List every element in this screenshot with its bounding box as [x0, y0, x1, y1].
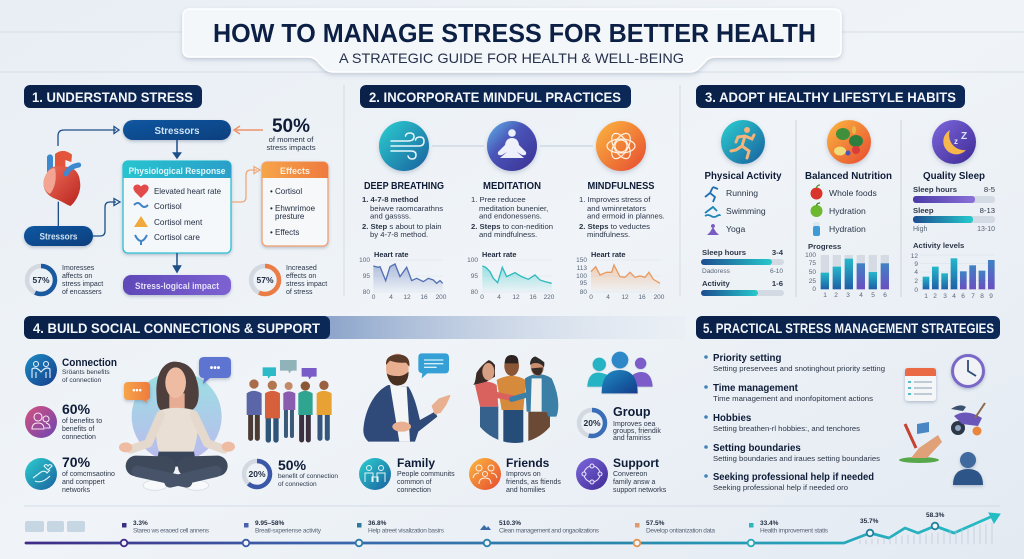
icon: meditation [487, 121, 537, 171]
item: 70 percent: of comcmsaotino [62, 471, 115, 478]
bar chart: progress: 6 [883, 292, 887, 299]
physiological response box: Cortisol ment [154, 218, 203, 227]
line chart: heart rate mindfulness: 12 [621, 294, 629, 301]
icon: heart rate [133, 184, 149, 198]
panel: social connections [24, 316, 685, 494]
timeline stat 4 [480, 520, 600, 534]
line chart: heart rate meditation: 0 [480, 294, 484, 301]
icon: group of users [587, 352, 653, 393]
line chart: heart rate meditation [467, 250, 555, 301]
column: meditation: and endonessens. [479, 212, 542, 220]
timeline stat 4: Clean management and ongaolizations [499, 528, 600, 534]
line chart: heart rate meditation: 12 [512, 294, 520, 301]
bar chart: activity levels [911, 253, 995, 300]
item: support: family answ a [613, 479, 656, 486]
effects box [262, 162, 328, 246]
line chart: heart rate meditation: 95 [471, 273, 478, 280]
item: 60 percent [25, 401, 102, 441]
main title: HOW TO MANAGE STRESS FOR BETTER HEALTH [213, 18, 816, 48]
strategy: seeking professional help: Seeking professional help if needed oro [713, 483, 848, 492]
donut: 57 percent right: of stress [286, 289, 313, 296]
line chart: heart rate mindfulness: 80 [580, 289, 587, 296]
timeline stat 4: 510.3% [499, 520, 521, 527]
icon: sleep [932, 120, 976, 164]
physiological response box: Elevated heart rate [154, 187, 221, 196]
top stressors pill [123, 120, 231, 140]
timeline stat 5 [635, 520, 715, 534]
timeline stat 6: 33.4% [760, 520, 779, 527]
item: 60 percent: connection [62, 434, 96, 441]
physiological response box [123, 161, 231, 253]
column: meditation: meditation bunenier, [479, 204, 548, 213]
column: meditation: and mindfulness. [479, 230, 537, 239]
bar chart: progress: 5 [871, 292, 875, 299]
column: quality sleep [911, 170, 995, 300]
heading: section 3: 3. ADOPT HEALTHY LIFESTYLE HABITS [705, 89, 956, 105]
donut: 57 percent right [251, 265, 327, 296]
bar chart: progress: 75 [809, 260, 816, 267]
bar chart: progress: 0 [812, 286, 816, 293]
item: 70 percent [25, 454, 115, 494]
donut: 20 percent with 50 percent benefit: 20% [248, 469, 266, 479]
timeline footer [25, 512, 1000, 546]
arrow: heart to stressors [58, 126, 119, 146]
icon: sleep: z [954, 137, 958, 146]
strategy: setting boundaries: Setting boundaries [713, 443, 801, 454]
icon: swimming [705, 207, 720, 217]
item: connection: Connection [62, 357, 117, 369]
line chart: heart rate breathing: 200 [436, 294, 447, 301]
speech bubble: blue [199, 357, 231, 384]
illustration: meditating woman: ••• [210, 363, 221, 374]
bar chart: activity levels: 2 [933, 293, 937, 300]
strategy: hobbies: Hobbies [713, 413, 751, 424]
line chart: heart rate mindfulness [576, 250, 665, 301]
icon: hobby flag and tools [899, 422, 942, 463]
thumbnails [25, 521, 85, 532]
item: 70 percent: 70% [62, 454, 91, 470]
item: family: common of [397, 479, 432, 486]
icon: warning [134, 216, 148, 227]
heading: section 1: 1. UNDERSTAND STRESS [32, 89, 193, 105]
statistic: 50 percent: stress impacts [266, 143, 316, 152]
donut: 20 percent group: and famiriss [613, 435, 651, 442]
bar chart: progress: 3 [846, 292, 850, 299]
line chart: heart rate breathing: 12 [403, 294, 411, 301]
donut: 57 percent left [27, 265, 103, 296]
line chart: heart rate mindfulness: 0 [589, 294, 593, 301]
illustration: meditating woman: ••• [132, 385, 142, 395]
column: physical activity: Running [726, 188, 758, 198]
donut: 57 percent left: Imoresses [62, 265, 95, 272]
left stressors pill: Stressors [40, 232, 78, 242]
effects box: Effects [280, 166, 310, 176]
item: 60 percent: 60% [62, 401, 91, 417]
line chart: heart rate meditation: 16 [529, 294, 537, 301]
panel: practical strategies [696, 316, 1000, 492]
arrow: response to effects [231, 166, 260, 202]
icon: green apple [810, 203, 822, 217]
item: 60 percent: benefits of [62, 426, 94, 433]
column: deep breathing: DEEP BREATHING [364, 181, 444, 192]
column: physical activity: Activity [702, 279, 730, 288]
donut: 57 percent left: stress impact [62, 281, 103, 288]
line chart: heart rate mindfulness: Heart rate [591, 250, 626, 259]
donut: 20 percent with 50 percent benefit [244, 457, 338, 488]
effects box: • Effects [270, 228, 299, 237]
icon: calendar [905, 368, 936, 401]
line chart: heart rate meditation: 100 [467, 257, 478, 264]
bar chart: activity levels: 4 [952, 293, 956, 300]
donut: 20 percent group: Improves oea [613, 421, 656, 428]
icon: runner [721, 120, 765, 164]
column: balanced nutrition: Balanced Nutrition [805, 170, 892, 182]
bar chart: progress: 100 [805, 252, 816, 259]
column: physical activity: 6-10 [770, 268, 783, 275]
column: physical activity: 1-6 [772, 279, 783, 288]
column: mindfulness: and wminretators [587, 204, 646, 213]
column: physical activity: Swimming [726, 206, 766, 216]
column: physical activity [701, 170, 784, 296]
top stressors pill: Stressors [154, 126, 200, 137]
timeline stat 2 [244, 520, 322, 534]
arrow: stressors to response box [174, 140, 180, 158]
line chart: heart rate breathing: 16 [420, 294, 428, 301]
stress-logical impact pill: Stress-logical impact [135, 281, 220, 292]
column: physical activity: Sleep hours [702, 248, 746, 257]
donut: 20 percent with 50 percent benefit: of connection [278, 481, 317, 488]
illustration: group of people talking [247, 360, 332, 440]
heading: section 3 [696, 85, 965, 108]
icon: receptor [135, 235, 147, 245]
column: quality sleep: Sleep hours [913, 185, 957, 194]
line chart: heart rate breathing [359, 250, 447, 301]
column: balanced nutrition: Whole foods [829, 188, 877, 198]
donut: 57 percent right: 57% [256, 275, 274, 285]
line chart: heart rate meditation: 220 [544, 294, 555, 301]
heading: section 1 [24, 85, 202, 108]
timeline stat 1: 3.3% [133, 520, 148, 527]
statistic: 50 percent: 50% [272, 116, 310, 137]
timeline stat 3: Help atreet visalization basirs [368, 528, 445, 534]
bar chart: progress: 50 [809, 269, 816, 276]
item: 60 percent: of benefits to [62, 418, 102, 425]
timeline line with arrow [26, 513, 1000, 544]
column: deep breathing: 1. 4-7-8 method [362, 195, 419, 204]
column: mindfulness: and ermoid in plannes. [587, 212, 665, 220]
bar chart: activity levels: 0 [914, 287, 918, 294]
timeline stat 3: 36.8% [368, 520, 387, 527]
line chart: heart rate mindfulness: 113 [577, 265, 587, 272]
item: support: Convereon [613, 471, 647, 478]
line chart: heart rate mindfulness: 200 [654, 294, 665, 301]
icon: deep breathing [379, 121, 429, 171]
timeline stat 1: Stareo ws eraoed cell annens [133, 528, 210, 534]
illustration: three friends [473, 355, 558, 443]
item: friends [469, 456, 561, 494]
timeline stat 2: 9.95–58% [255, 520, 284, 527]
arrow: stressors to response [93, 198, 120, 236]
column: physical activity: Dadoress [702, 268, 731, 275]
line chart: heart rate mindfulness: 150 [576, 257, 587, 264]
column: mindfulness: 1. Improves stress of [579, 195, 651, 204]
item: friends: Improvs on [506, 471, 541, 478]
column: deep breathing: beiwve raomcarathns [370, 204, 443, 213]
donut: 20 percent with 50 percent benefit: 50% [278, 457, 307, 473]
bar chart: progress: 25 [809, 278, 816, 285]
arrow: statistic to stressors [234, 126, 263, 134]
bar chart: activity levels: 12 [911, 253, 918, 260]
column: meditation: 1. Pree reducee [471, 195, 526, 204]
title banner [183, 9, 841, 72]
item: family: People communits [397, 471, 455, 478]
heading: section 2: 2. INCORPORATE MINDFUL PRACTICES [369, 89, 621, 105]
column: deep breathing: and gassss. [370, 212, 411, 220]
icon: water glass [813, 222, 820, 236]
panel: understand stress [24, 85, 328, 296]
column: quality sleep: High [913, 226, 928, 233]
chart peak label 58.3 percent: 58.3% [926, 512, 945, 519]
item: connection: of connection [62, 377, 102, 384]
column: quality sleep: Activity levels [913, 241, 964, 250]
strategy: priority setting: Setting preservees and snotinghout priority setting [713, 364, 885, 373]
timeline stat 3 [357, 520, 445, 534]
timeline stat 2: Breatl-sxperiense activity [255, 528, 322, 534]
donut: 57 percent right: Increased [286, 265, 317, 272]
stress-logical impact pill [123, 275, 231, 295]
physiological response box: Physiological Response [128, 166, 226, 176]
illustration: man presenting [363, 353, 449, 442]
column: deep breathing: 2. Step s about to plain [362, 222, 442, 231]
line chart: heart rate breathing: 100 [359, 257, 370, 264]
line chart: heart rate meditation: 80 [471, 289, 478, 296]
column: quality sleep: Quality Sleep [923, 170, 985, 182]
arrow: response to impact [174, 253, 180, 272]
left stressors pill [24, 226, 93, 246]
item: friends: friends, as ftiends [506, 479, 561, 486]
bar chart: progress [805, 252, 889, 299]
bar chart: activity levels: 8 [980, 293, 984, 300]
column: quality sleep: Sleep [913, 206, 934, 215]
line chart: heart rate breathing: 0 [372, 294, 376, 301]
item: connection: Sröants benefits [62, 369, 110, 376]
column: quality sleep: 8-5 [984, 185, 995, 194]
heading: section 4: 4. BUILD SOCIAL CONNECTIONS & SUPPORT [33, 320, 320, 336]
physiological response box: Cortisol care [154, 233, 200, 242]
line chart: heart rate mindfulness: 4 [606, 294, 610, 301]
item: friends: and homilies [506, 487, 546, 494]
timeline stat 5: 57.5% [646, 520, 665, 527]
strategy: seeking professional help: Seeking professional help if needed [713, 472, 874, 483]
donut: 57 percent left: affects on [62, 273, 92, 280]
strategy: priority setting [704, 353, 885, 373]
line chart: heart rate mindfulness: 16 [638, 294, 646, 301]
effects box: • Cortisol [270, 187, 302, 196]
timeline stat 5: Develop ontianization data [646, 528, 715, 534]
speech bubble: orange [124, 382, 150, 403]
donut: 20 percent group: 20% [583, 418, 601, 428]
donut: 20 percent group: groups, friendik [613, 428, 661, 435]
icon: running [705, 187, 718, 202]
column: deep breathing: by 4-7-8 method. [370, 230, 428, 239]
column: physical activity: Physical Activity [704, 170, 782, 182]
strategy: seeking professional help [704, 472, 874, 492]
bar chart: activity levels: 3 [943, 293, 947, 300]
column: balanced nutrition: Hydration [829, 206, 866, 216]
item: family: Family [397, 456, 435, 470]
bar chart: progress: 4 [859, 292, 863, 299]
column: meditation: MEDITATION [483, 181, 541, 192]
icon: nutrition [827, 120, 871, 164]
donut: 20 percent group [579, 405, 661, 442]
column: meditation: 2. Steps to con-nedition [471, 222, 553, 231]
illustration: meditating woman [119, 357, 235, 490]
line chart: heart rate mindfulness: 100 [576, 273, 587, 280]
item: family: connection [397, 487, 431, 494]
heading: section 5 [696, 316, 1000, 339]
line chart: heart rate meditation: Heart rate [482, 250, 517, 259]
icon: person [953, 452, 983, 485]
bar chart: activity levels: 6 [961, 293, 965, 300]
bar chart: activity levels: 2 [914, 278, 918, 285]
heading: section 4 [24, 316, 685, 339]
icon: mindfulness [596, 121, 646, 171]
bar chart: activity levels: 9 [989, 293, 993, 300]
strategy: time management [704, 383, 873, 403]
donut: 57 percent left: of encassers [62, 289, 102, 296]
donut: 57 percent left: 57% [32, 275, 50, 285]
panel: healthy lifestyle habits [696, 85, 995, 300]
strategy: time management: Time management [713, 383, 799, 394]
bar chart: activity levels: 9 [914, 261, 918, 268]
line chart: heart rate breathing: 95 [363, 273, 370, 280]
timeline stat 1 [122, 520, 210, 534]
column: quality sleep: 8-13 [980, 206, 995, 215]
line chart: heart rate breathing: 4 [389, 294, 393, 301]
icon: yoga [707, 224, 719, 235]
item: 70 percent: and comppert [62, 479, 105, 486]
timeline stat 6 [749, 520, 829, 534]
timeline nodes [121, 523, 938, 546]
column: mindfulness: MINDFULNESS [588, 181, 655, 192]
line chart: heart rate meditation: 4 [497, 294, 501, 301]
strategy: priority setting: Priority setting [713, 353, 781, 364]
icon: clock [952, 356, 984, 386]
item: connection [25, 354, 117, 386]
line chart: heart rate mindfulness: 95 [580, 280, 587, 287]
donut: 20 percent with 50 percent benefit: benefit of connection [278, 473, 338, 480]
donut: 57 percent right: effects on [286, 273, 316, 280]
chart peak label 35.7 percent: 35.7% [860, 518, 879, 525]
line chart: heart rate breathing: 80 [363, 289, 370, 296]
item: family [359, 456, 455, 494]
column: balanced nutrition [805, 170, 892, 299]
icon: hobby vehicle [951, 403, 985, 436]
item: support: support networks [613, 487, 667, 494]
item: support: Support [613, 456, 659, 470]
item: friends: Friends [506, 456, 550, 470]
column: mindfulness [579, 181, 665, 239]
icon: heart [43, 151, 80, 227]
bar chart: progress: 2 [834, 292, 838, 299]
column: quality sleep: 13-10 [977, 226, 995, 233]
strategy: setting boundaries: Setting boundaries and iraues setting boundaries [713, 454, 880, 463]
bar chart: progress: 1 [823, 292, 827, 299]
timeline stat 6: Health improvement statis [760, 528, 829, 534]
panel: mindful practices [359, 85, 665, 301]
column: physical activity: 3-4 [772, 248, 784, 257]
strategy: hobbies: Setting breathen-rl hobbies:, and tenchores [713, 424, 860, 433]
statistic: 50 percent [266, 116, 316, 152]
bar chart: activity levels: 1 [924, 293, 928, 300]
column: balanced nutrition: Hydration [829, 224, 866, 234]
bar chart: activity levels: 7 [971, 293, 975, 300]
bar chart: activity levels: 4 [914, 269, 918, 276]
strategy: hobbies [704, 413, 860, 433]
statistic: 50 percent: of moment of [269, 135, 314, 144]
donut: 20 percent group: Group [613, 405, 651, 419]
column: mindfulness: 2. Steps to veductes [579, 222, 650, 231]
item: support [576, 456, 667, 494]
strategy: time management: Time management and ınonfopitoment actions [713, 394, 873, 403]
column: deep breathing [362, 181, 444, 239]
icon: wave [134, 203, 148, 207]
donut: 57 percent right: stress impact [286, 281, 327, 288]
column: balanced nutrition: Progress [808, 242, 841, 251]
icon: sleep: Z [961, 131, 967, 142]
column: physical activity: Yoga [726, 224, 746, 234]
column: mindfulness: mindfulness. [587, 230, 630, 239]
icon: apple [810, 185, 822, 200]
heading: section 2 [360, 85, 631, 108]
effects box: presture [275, 212, 305, 221]
line chart: heart rate breathing: Heart rate [374, 250, 409, 259]
physiological response box: Cortisol [154, 202, 182, 211]
strategy: setting boundaries [704, 443, 880, 463]
column: meditation [471, 181, 553, 239]
effects box: • Ehwnrimoe [270, 204, 316, 213]
subtitle: A STRATEGIC GUIDE FOR HEALTH & WELL-BEING [339, 50, 684, 66]
item: 70 percent: networks [62, 487, 91, 494]
